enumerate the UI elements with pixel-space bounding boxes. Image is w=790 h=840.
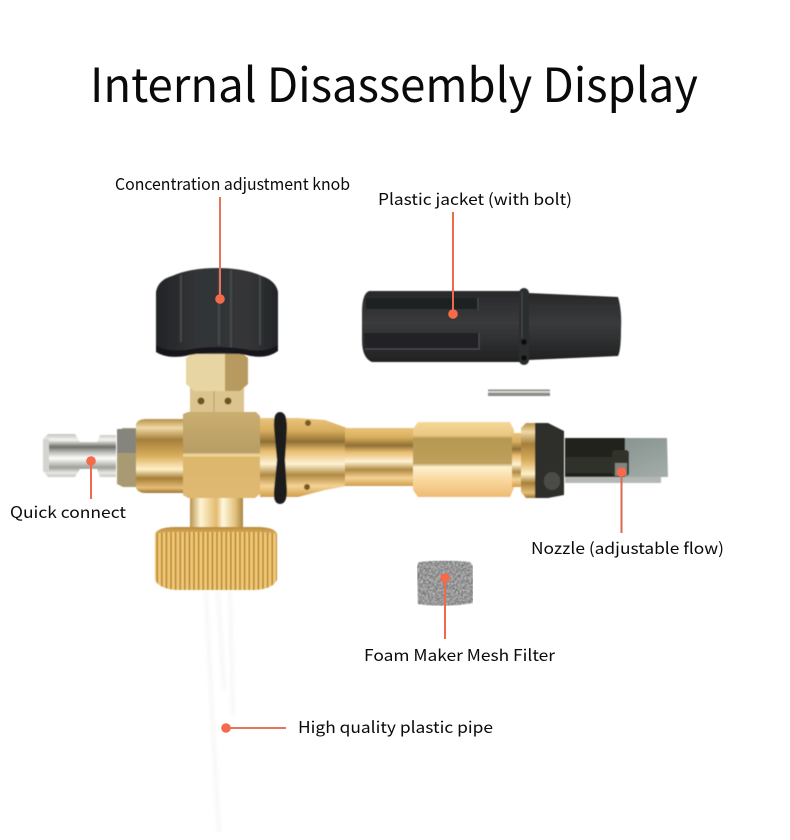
callout: concentration knob: Concentration adjustment knob <box>115 171 350 195</box>
foam mesh filter <box>417 560 473 606</box>
quick connect fitting <box>43 434 116 477</box>
knob stem hex <box>186 350 248 415</box>
hex nut <box>117 428 136 487</box>
callout: quick connect <box>10 456 126 523</box>
product assembly <box>43 268 668 590</box>
plastic pipe <box>206 592 233 832</box>
callout: foam maker mesh filter <box>364 573 556 666</box>
bolt pin <box>488 390 550 396</box>
callout: plastic jacket <box>378 186 572 319</box>
concentration knob <box>156 268 278 357</box>
nozzle <box>535 423 668 498</box>
brass collar and o-ring <box>260 412 347 504</box>
brass collar at nozzle <box>512 423 535 498</box>
callout: plastic pipe <box>221 714 493 738</box>
main brass hex body <box>183 412 260 498</box>
brass hex sleeve <box>413 422 514 497</box>
callout: foam maker mesh filter: Foam Maker Mesh Filter <box>364 642 556 666</box>
callout: plastic pipe: High quality plastic pipe <box>298 714 493 738</box>
callout: plastic jacket: Plastic jacket (with bolt) <box>378 186 572 210</box>
callout: quick connect: Quick connect <box>10 499 126 523</box>
title: Internal Disassembly Display <box>90 47 698 116</box>
plastic jacket <box>362 288 621 365</box>
brass cylinder <box>136 419 184 493</box>
stem below body <box>190 498 243 530</box>
callout: concentration knob <box>115 171 350 304</box>
knurled nut <box>155 527 277 590</box>
callout: nozzle: Nozzle (adjustable flow) <box>531 535 724 559</box>
callout: nozzle <box>531 467 724 559</box>
brass tube <box>345 428 415 486</box>
